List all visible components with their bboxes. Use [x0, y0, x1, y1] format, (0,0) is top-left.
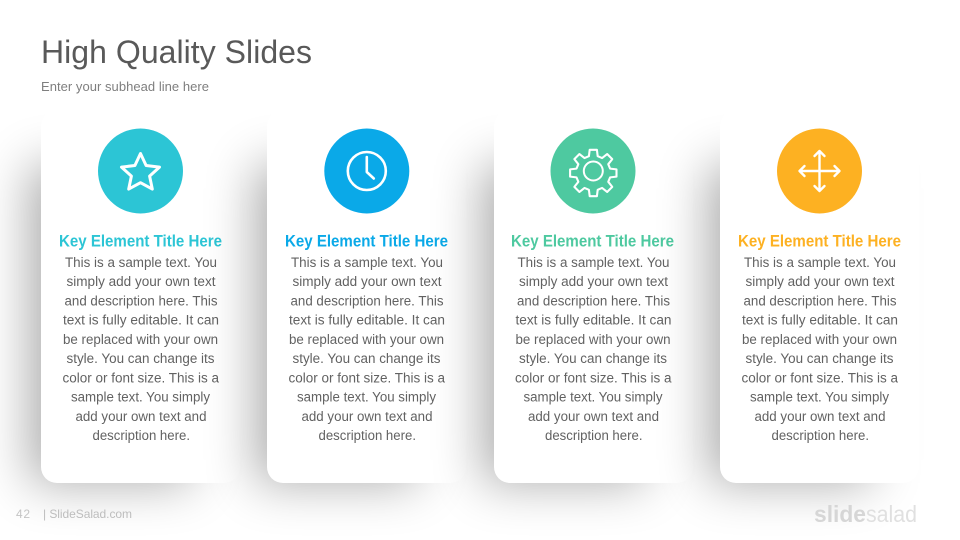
panel: card 3 [483, 110, 693, 483]
card 1 title: Key Element Title Here [59, 232, 222, 250]
card 1 text: This is a sample text. You [65, 255, 217, 270]
card 3 title: Key Element Title Here [511, 232, 674, 250]
card 4 text: description here. [772, 428, 869, 443]
card 1 text: and description here. This [64, 293, 218, 308]
card 3 text: and description here. This [517, 293, 670, 308]
card 4 text: add your own text and [754, 409, 886, 424]
card 3 text: style. You can change its [519, 351, 667, 366]
card 3 text: description here. [545, 428, 642, 443]
card 4 text: color or font size. This is a [742, 370, 898, 385]
panel: card 2 [256, 110, 466, 483]
card 4 text: text is fully editable. It can [742, 313, 898, 328]
card 1 text: text is fully editable. It can [63, 313, 219, 328]
card 3 text: sample text. You simply [524, 390, 663, 404]
card 1 text [62, 255, 219, 443]
card 2 text: simply add your own text [292, 274, 442, 289]
logo [814, 501, 917, 527]
card 4 text: be replaced with your own [742, 332, 897, 347]
panel: card 4 [709, 110, 919, 483]
title: High Quality Slides [41, 34, 312, 70]
logo: salad [866, 501, 917, 527]
card 2 text: and description here. This [290, 293, 444, 308]
card 2 text: style. You can change its [292, 351, 441, 366]
icon: star [98, 128, 183, 214]
card 2 text: text is fully editable. It can [289, 313, 445, 328]
page number: 42 [16, 507, 30, 521]
card 4 text: simply add your own text [746, 274, 895, 289]
card 2 text: add your own text and [302, 409, 432, 424]
card 2 text: color or font size. This is a [288, 370, 445, 385]
card 1 text: simply add your own text [66, 274, 216, 289]
card 2 title: Key Element Title Here [285, 232, 448, 250]
card 3 text: color or font size. This is a [515, 370, 672, 385]
card 1 text: add your own text and [76, 409, 206, 424]
card 2 text [288, 255, 445, 443]
card 3 text: text is fully editable. It can [516, 313, 672, 328]
card 3 text: This is a sample text. You [518, 255, 670, 270]
card 1 text: style. You can change its [66, 351, 215, 366]
subhead: Enter your subhead line here [41, 79, 209, 94]
card 2 text: be replaced with your own [289, 332, 444, 347]
card 4 text: and description here. This [744, 293, 897, 308]
card 2 text: This is a sample text. You [291, 255, 443, 270]
logo: slide [814, 501, 866, 527]
card 4 text: This is a sample text. You [744, 255, 896, 270]
card 4 text: sample text. You simply [750, 390, 889, 404]
card 3 text [515, 255, 672, 443]
card 1 text: be replaced with your own [63, 332, 218, 347]
footer text: | SlideSalad.com [43, 507, 132, 521]
card 1 text: description here. [92, 428, 190, 443]
card 4 text [742, 255, 898, 443]
card 1 text: color or font size. This is a [62, 370, 219, 385]
card 4 text: style. You can change its [746, 351, 894, 366]
card 2 text: description here. [318, 428, 416, 443]
card 4 title: Key Element Title Here [738, 232, 901, 250]
card 3 text: simply add your own text [519, 274, 668, 289]
panel: card 1 [30, 110, 240, 483]
card 1 text: sample text. You simply [71, 390, 210, 404]
icon: move arrows [777, 128, 862, 214]
card 3 text: add your own text and [528, 409, 659, 424]
card 3 text: be replaced with your own [516, 332, 670, 347]
card 2 text: sample text. You simply [297, 390, 436, 404]
icon: gear [550, 128, 636, 214]
icon: clock [324, 128, 409, 214]
